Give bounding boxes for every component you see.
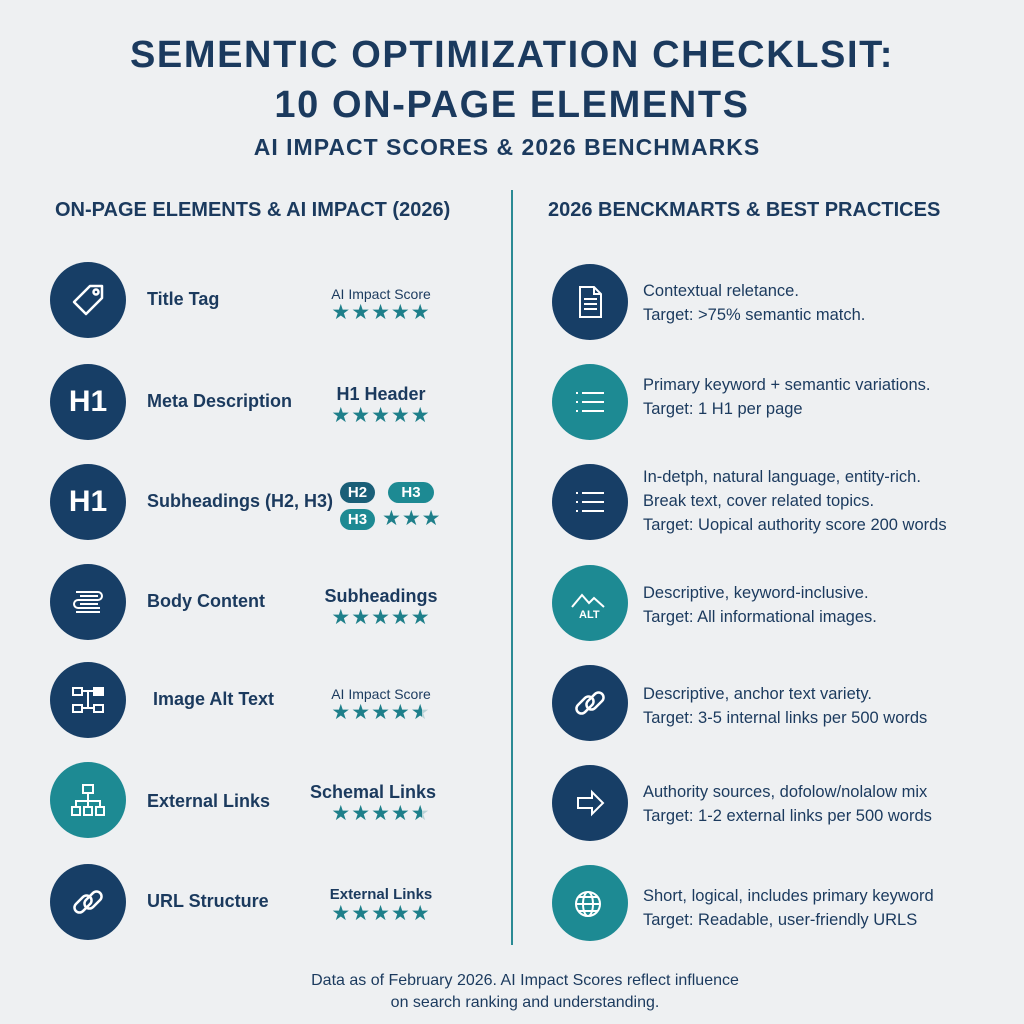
- text row 2: [643, 376, 930, 418]
- icon: flow: [50, 662, 126, 738]
- text row 6: Target: 1-2 external links per 500 words: [643, 807, 932, 825]
- right row 7: [552, 865, 628, 941]
- left row: subheadings: [50, 464, 441, 540]
- text row 5: Descriptive, anchor text variety.: [643, 685, 872, 703]
- score: Schemal Links: [310, 782, 436, 802]
- label: Title Tag: [147, 289, 219, 309]
- text row 6: [643, 783, 932, 825]
- label: URL Structure: [147, 891, 269, 911]
- icon: document: [552, 264, 628, 340]
- text row 2: Primary keyword + semantic variations.: [643, 376, 930, 394]
- title: SEMENTIC OPTIMIZATION CHECKLSIT:: [130, 34, 894, 76]
- left row: meta description: [50, 364, 431, 440]
- score: [331, 286, 431, 324]
- score: ★★★★★: [331, 902, 431, 925]
- left row: body content: [50, 564, 438, 640]
- icon: lines: [50, 564, 126, 640]
- tags: H3: [401, 484, 421, 501]
- text row 1: [643, 282, 865, 324]
- tags: ★★★: [382, 507, 441, 530]
- label: Body Content: [147, 591, 265, 611]
- text row 3: [643, 468, 947, 534]
- right row 5: [552, 665, 628, 741]
- left row: url structure: [50, 864, 432, 940]
- score: [324, 586, 438, 629]
- score: External Links: [330, 886, 432, 903]
- tags: H2: [348, 484, 367, 501]
- right row 6: [552, 765, 628, 841]
- right row 4: ALT: [579, 609, 600, 621]
- score: [331, 686, 431, 724]
- footer: [311, 972, 739, 1011]
- right row 3: [552, 464, 628, 540]
- footer: Data as of February 2026. AI Impact Scores reflect influence: [311, 972, 739, 989]
- score: ★★★★★: [331, 404, 431, 427]
- right row 1: [552, 264, 628, 340]
- text row 3: In-detph, natural language, entity-rich.: [643, 468, 921, 486]
- score: AI Impact Score: [331, 686, 431, 702]
- tags: H3: [348, 511, 367, 528]
- text row 6: Authority sources, dofolow/nolalow mix: [643, 783, 927, 801]
- label: External Links: [147, 791, 270, 811]
- icon: H1: H1: [69, 485, 107, 518]
- title: [130, 34, 894, 126]
- text row 3: Target: Uopical authority score 200 words: [643, 516, 947, 534]
- score: ★★★★★: [331, 802, 431, 825]
- score: Subheadings: [324, 586, 438, 606]
- label: Image Alt Text: [153, 689, 274, 709]
- right row 2: [552, 364, 628, 440]
- text row 4: Descriptive, keyword-inclusive.: [643, 584, 869, 602]
- left heading: ON-PAGE ELEMENTS & AI IMPACT (2026): [55, 199, 450, 221]
- score: ★★★★★: [331, 301, 431, 324]
- text row 4: Target: All informational images.: [643, 608, 877, 626]
- score: [331, 384, 431, 427]
- text row 1: Contextual reletance.: [643, 282, 799, 300]
- left row: external links: [50, 762, 436, 838]
- footer: on search ranking and understanding.: [391, 994, 659, 1011]
- right heading: 2026 BENCKMARTS & BEST PRACTICES: [548, 199, 940, 221]
- text row 7: Short, logical, includes primary keyword: [643, 887, 934, 905]
- left row: image alt: [50, 662, 431, 738]
- text row 3: Break text, cover related topics.: [643, 492, 874, 510]
- label: Subheadings (H2, H3): [147, 491, 333, 511]
- text row 7: [643, 887, 934, 929]
- score: [330, 886, 432, 925]
- score: AI Impact Score: [331, 286, 431, 302]
- left row: title tag: [50, 262, 431, 338]
- divider: [511, 190, 513, 945]
- label: Meta Description: [147, 391, 292, 411]
- score: [310, 782, 436, 825]
- icon: link: [50, 864, 126, 940]
- text row 5: [643, 685, 927, 727]
- subtitle: AI IMPACT SCORES & 2026 BENCHMARKS: [254, 134, 760, 160]
- score: ★★★★★: [331, 606, 431, 629]
- icon: H1: [50, 364, 126, 440]
- title: 10 ON-PAGE ELEMENTS: [274, 84, 750, 126]
- text row 7: Target: Readable, user-friendly URLS: [643, 911, 917, 929]
- icon: H1: [50, 464, 126, 540]
- text row 4: [643, 584, 877, 626]
- tags: [340, 482, 441, 530]
- icon: sitemap: [50, 762, 126, 838]
- right row 4: [552, 565, 628, 641]
- score: H1 Header: [336, 384, 426, 404]
- icon: H1: H1: [69, 385, 107, 418]
- icon: tag: [50, 262, 126, 338]
- text row 5: Target: 3-5 internal links per 500 words: [643, 709, 927, 727]
- text row 2: Target: 1 H1 per page: [643, 400, 803, 418]
- score: ★★★★★: [331, 701, 431, 724]
- text row 1: Target: >75% semantic match.: [643, 306, 865, 324]
